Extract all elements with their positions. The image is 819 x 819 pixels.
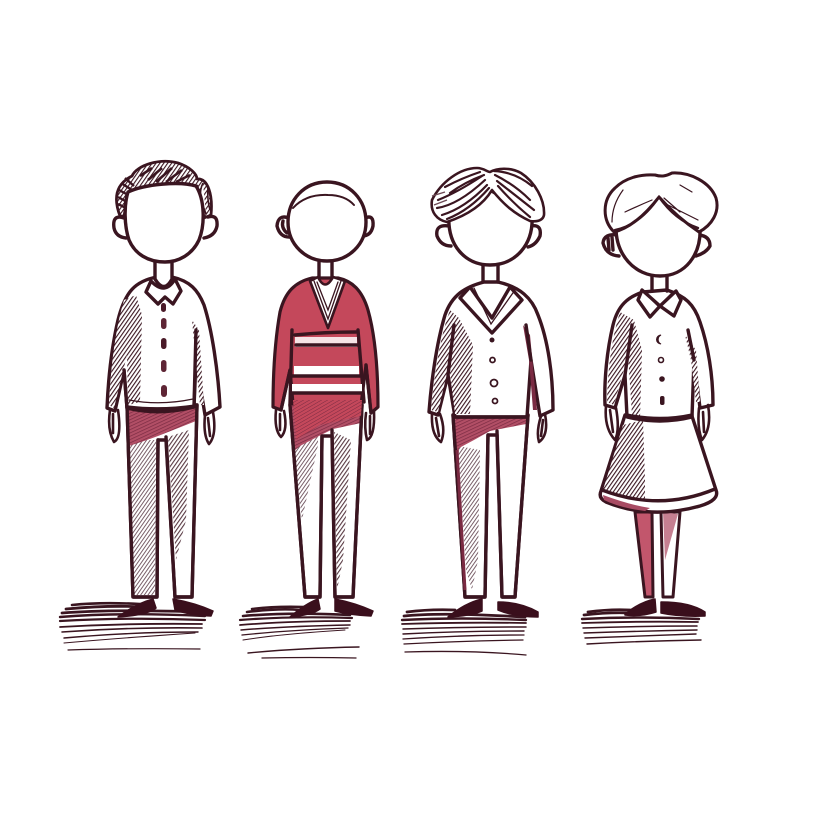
ears: [114, 216, 217, 238]
collar and buttons: [146, 279, 181, 397]
head: [288, 182, 366, 261]
v-neck collar: [310, 277, 345, 328]
neck: [155, 262, 172, 286]
head: [449, 190, 532, 265]
neck: [652, 275, 667, 291]
shoes: [290, 599, 373, 617]
head: [125, 184, 203, 262]
shirt and arms: [107, 277, 220, 415]
trousers: [127, 405, 197, 597]
shoes: [448, 599, 538, 617]
ground shadow 3: [402, 610, 526, 655]
ears: [277, 217, 373, 237]
head: [616, 195, 700, 276]
hands: [109, 410, 214, 444]
figure 2: bald man in red striped sweater: [240, 182, 378, 658]
hands: [276, 410, 374, 440]
collar and buttons: [638, 290, 681, 405]
blouse and arms: [605, 290, 713, 421]
hands: [432, 414, 546, 442]
ears: [603, 235, 710, 256]
sweater stripes: [291, 332, 362, 393]
figure 1: man with striped hair and white shirt: [60, 161, 220, 650]
hair: [432, 168, 544, 222]
ground shadow 4: [582, 610, 701, 644]
hair: [605, 173, 717, 232]
trousers: [453, 415, 528, 597]
neck: [319, 260, 332, 277]
trousers: [290, 405, 362, 597]
neck: [483, 265, 498, 282]
red sweater: [273, 278, 378, 440]
shoes: [118, 599, 213, 617]
v-neck collar and buttons: [460, 287, 522, 404]
figure 3: person with side-swept hair and v-neck shirt: [402, 168, 553, 655]
skirt: [600, 410, 717, 512]
hair: [116, 161, 211, 218]
hands: [606, 405, 709, 440]
shirt and arms: [429, 282, 553, 417]
shoes: [625, 599, 705, 616]
ground shadow 2: [240, 607, 359, 658]
ground shadow 1: [60, 603, 205, 650]
figure 4: woman with bob hair and skirt: [582, 173, 717, 644]
forehead line: [293, 195, 354, 208]
legs: [635, 512, 680, 597]
ears: [437, 226, 540, 247]
